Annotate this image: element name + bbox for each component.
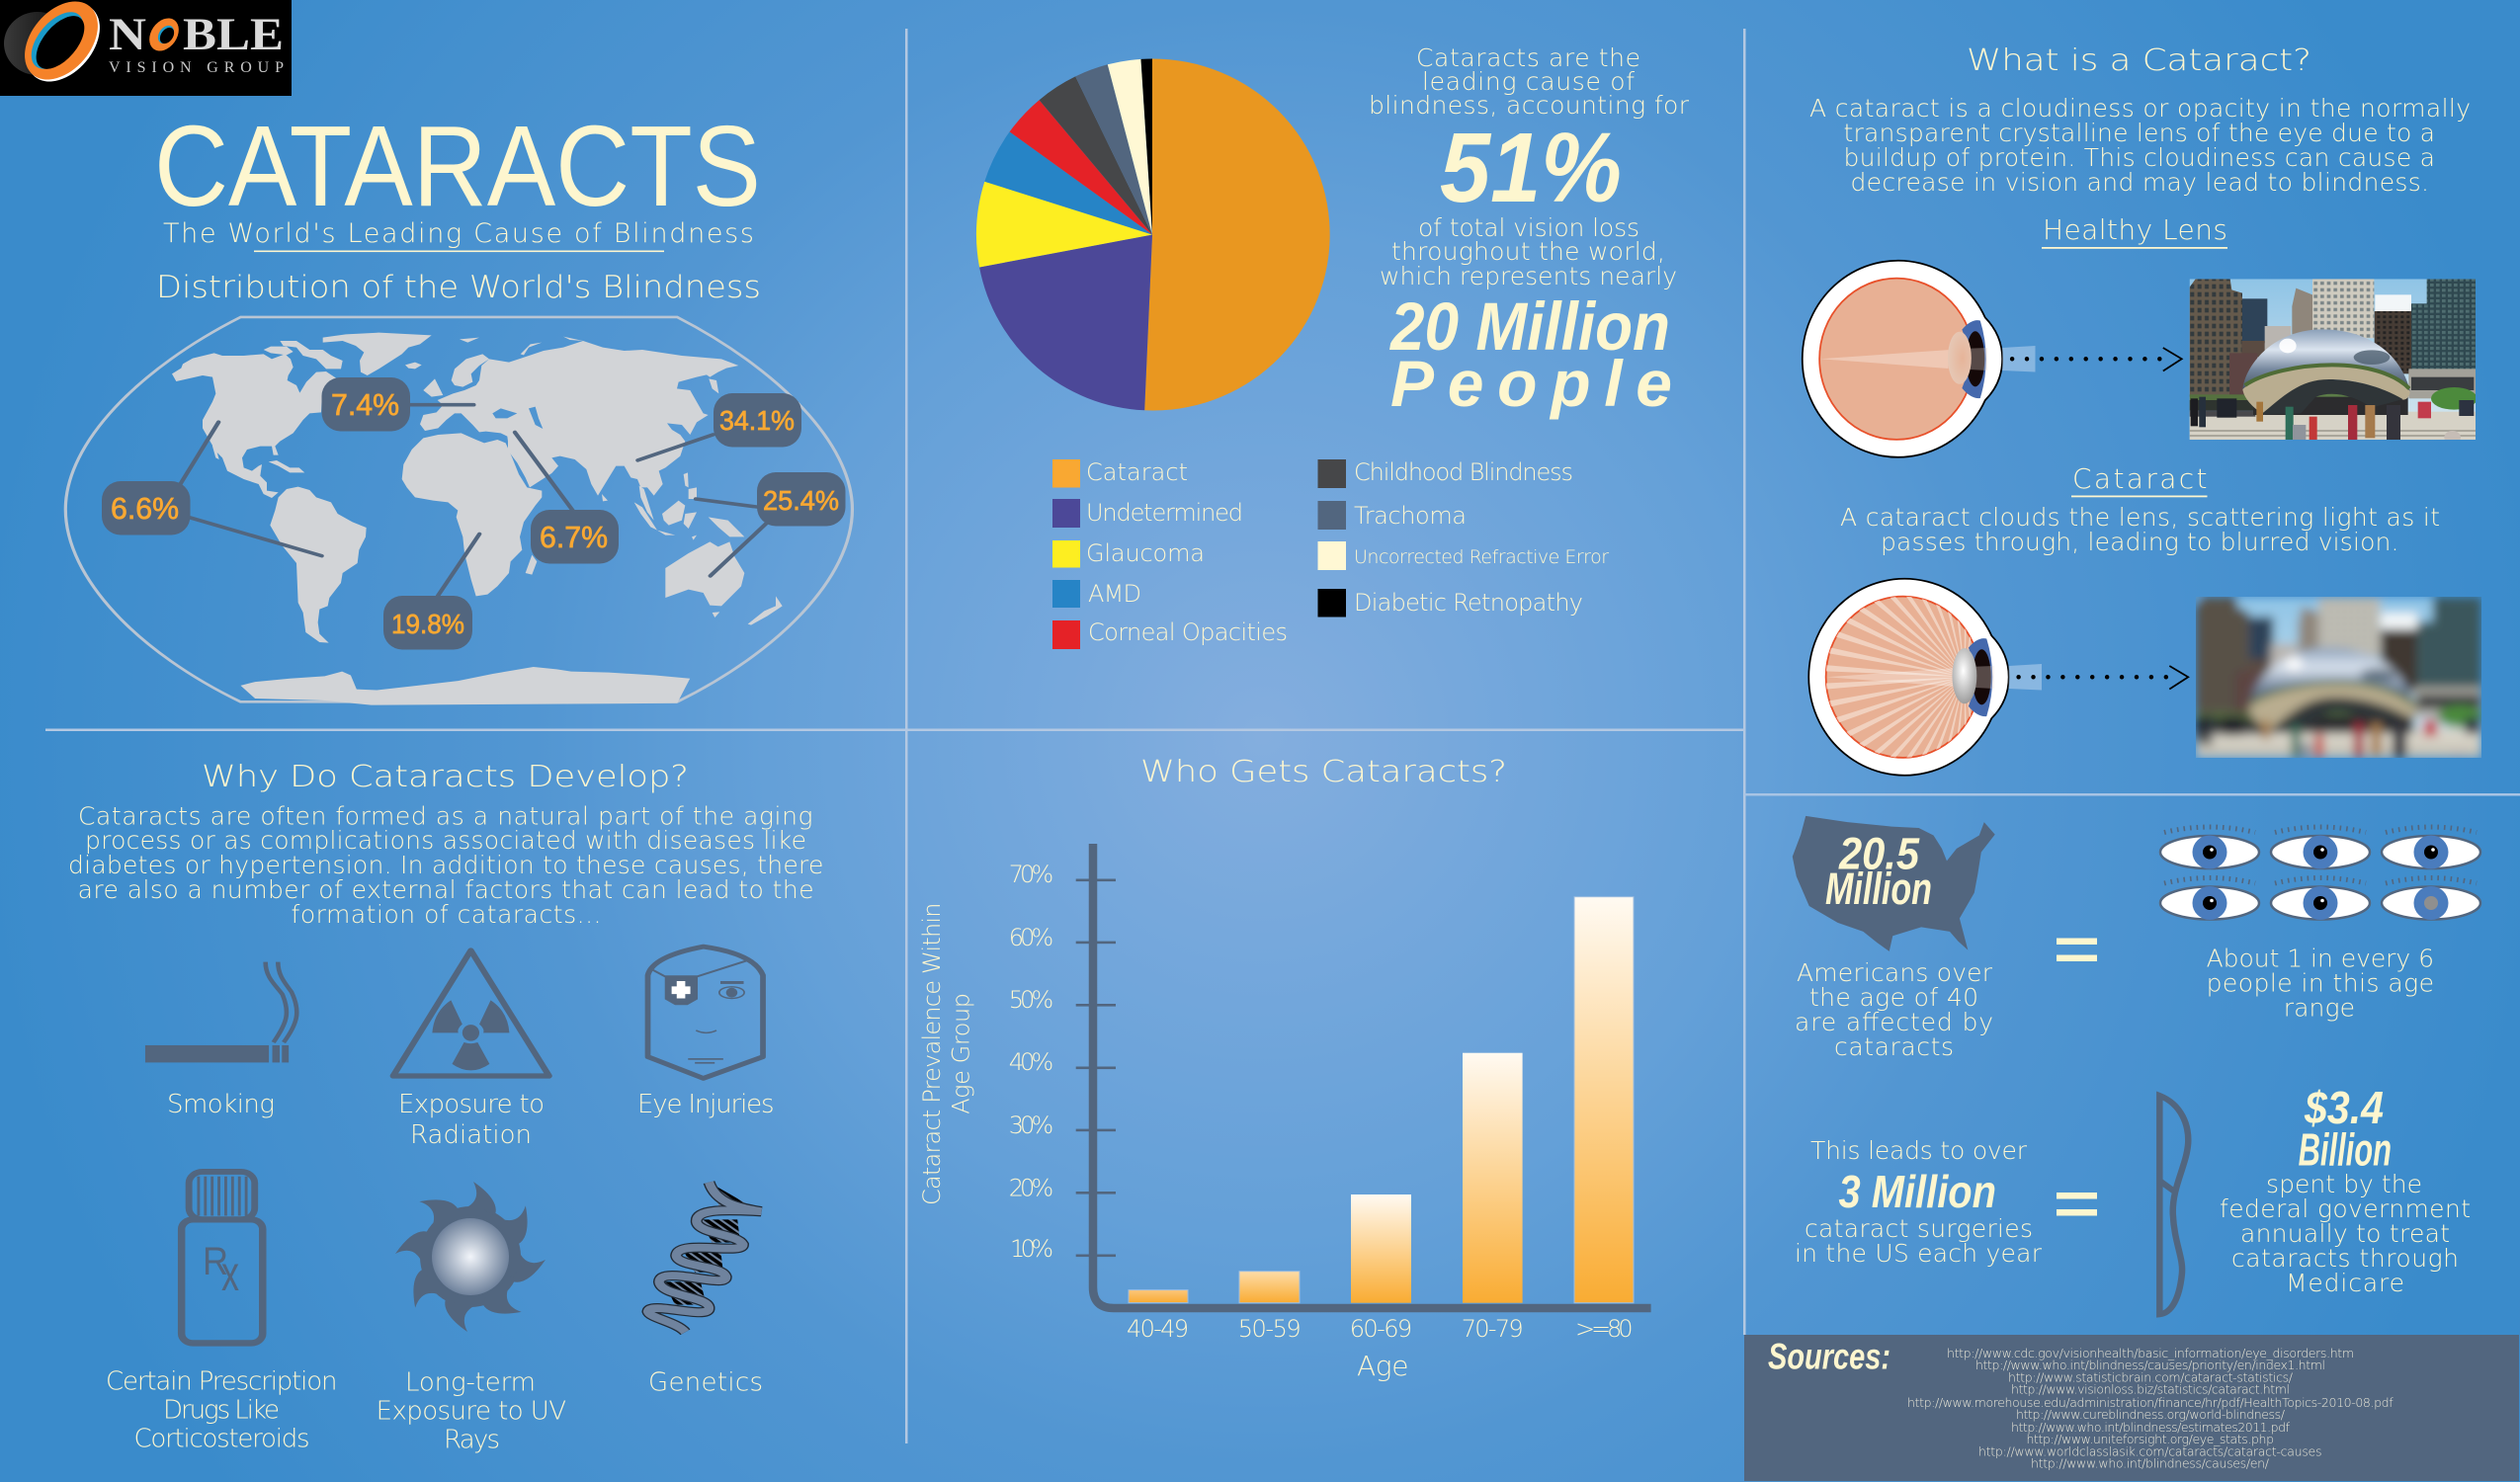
text block: 51% statistic: blindness, accounting for (1369, 91, 1690, 120)
bar chart: prevalence by age: 70% (1009, 861, 1053, 888)
panel: sources: http://www.worldclasslasik.com/cataracts/cataract-causes (1978, 1444, 2322, 1459)
pie legend (1052, 458, 1609, 649)
callout: 7.4% (322, 377, 410, 431)
text: 1 in 6: people in this age (2207, 969, 2434, 998)
equals sign (2057, 1193, 2097, 1215)
logo: Noble Vision Group: VISION GROUP (109, 59, 284, 76)
bar chart: prevalence by age: 70-79 (1462, 1315, 1524, 1343)
stat: $3.4 billion: Billion (2299, 1124, 2392, 1176)
text block: 51% statistic: of total vision loss (1418, 213, 1639, 242)
icon: eye injuries (637, 947, 775, 1119)
definition paragraph: transparent crystalline lens of the eye due to a (1844, 119, 2435, 147)
equals sign (2057, 939, 2097, 961)
pie chart (976, 58, 1330, 410)
text: 1 in 6: About 1 in every 6 (2207, 945, 2434, 973)
stat: 3 million surgeries: cataract surgeries (1805, 1214, 2033, 1243)
heading: cataract: Cataract (2072, 462, 2208, 495)
causes paragraph: formation of cataracts... (291, 900, 601, 929)
icon: UV sun: Exposure to UV (377, 1397, 566, 1427)
panel: sources: http://www.who.int/blindness/causes/priority/en/index1.html (1975, 1358, 2325, 1372)
text block: 51% statistic: Cataracts are the (1416, 43, 1640, 72)
icon and stat: 20.5 million Americans: cataracts (1834, 1032, 1954, 1061)
bar chart: prevalence by age: 50% (1009, 986, 1053, 1014)
callout: 19.8% (383, 596, 472, 650)
subtitle: The World's Leading Cause of Blindness (163, 218, 754, 249)
bar chart: prevalence by age: Age Group (948, 993, 975, 1114)
panel: sources: http://www.morehouse.edu/administration/finance/hr/pdf/HealthTopics-2010-08.pdf (1907, 1395, 2394, 1410)
bar chart: prevalence by age: 10% (1010, 1235, 1053, 1263)
panel: sources: http://www.cdc.gov/visionhealth/basic_information/eye_disorders.htm (1947, 1346, 2354, 1360)
stat: $3.4 billion: spent by the (2266, 1170, 2422, 1198)
causes paragraph: Cataracts are often formed as a natural part of the aging (78, 802, 812, 830)
stat: $3.4 billion: annually to treat (2240, 1219, 2450, 1248)
icon: prescription bottle: x (221, 1246, 239, 1301)
icon: DNA helix (648, 1183, 763, 1397)
definition paragraph: A cataract is a cloudiness or opacity in the normally (1809, 94, 2471, 123)
icons: six eyes (2160, 827, 2480, 920)
text block: 51% statistic: 51% (1440, 113, 1622, 223)
bar chart: prevalence by age: Age (1357, 1350, 1409, 1382)
callout: 6.6%: 6.6% (111, 491, 179, 526)
icon and stat: 20.5 million Americans: Americans over (1797, 958, 1993, 987)
bar chart: prevalence by age (918, 844, 1651, 1382)
stat: 3 million surgeries: This leads to over (1810, 1136, 2028, 1165)
icon: smoking: Smoking (167, 1090, 275, 1119)
bar chart: prevalence by age: 50-59 (1238, 1315, 1302, 1343)
bar chart: prevalence by age: 60% (1009, 924, 1053, 951)
cataract explanation text (1840, 503, 2440, 556)
icon: prescription bottle (106, 1172, 338, 1454)
stat: $3.4 billion (2220, 1082, 2471, 1297)
icon: prescription bottle: Drugs Like (163, 1395, 280, 1425)
icon: prescription bottle: Corticosteroids (134, 1425, 310, 1454)
icon and stat: 20.5 million Americans: 20.5 (1838, 828, 1920, 879)
callout: 7.4%: 7.4% (331, 387, 399, 422)
icon: radiation: Exposure to (398, 1090, 545, 1119)
bar chart: prevalence by age: 20% (1009, 1175, 1053, 1202)
icon: eye injuries: Eye Injuries (637, 1090, 775, 1119)
icon: DNA helix: Genetics (648, 1367, 763, 1397)
callout: 25.4% (757, 472, 846, 526)
icon: radiation (393, 950, 549, 1150)
definition paragraph: buildup of protein. This cloudiness can cause a (1844, 143, 2435, 172)
text block: 51% statistic: People (1390, 347, 1672, 420)
stat: 3 million surgeries: 3 Million (1838, 1166, 1996, 1217)
icon: radiation: Radiation (410, 1120, 532, 1150)
text block: 51% statistic: which represents nearly (1380, 262, 1677, 290)
panel: sources (1744, 1335, 2519, 1481)
eye diagram: cataract (1808, 579, 2188, 776)
icon: prescription bottle: Certain Prescription (106, 1367, 338, 1397)
panel: sources: http://www.who.int/blindness/causes/en/ (2031, 1456, 2270, 1471)
bar chart: prevalence by age: 30% (1009, 1112, 1053, 1139)
bar chart: prevalence by age: Cataract Prevalence Within (918, 903, 946, 1205)
bar chart: prevalence by age: 60-69 (1350, 1315, 1412, 1343)
pie legend: Trachoma (1354, 502, 1467, 530)
text block: 51% statistic: 20 Million (1388, 288, 1670, 365)
icon: scalpel (2159, 1096, 2188, 1314)
heading: what is a cataract: What is a Cataract? (1967, 43, 2311, 78)
causes paragraph: are also a number of external factors that can lead to the (78, 875, 814, 904)
callout: 34.1%: 34.1% (719, 405, 795, 436)
text block: 51% statistic: throughout the world, (1391, 237, 1665, 266)
causes paragraph: process or as complications associated with diseases like (85, 826, 806, 855)
photo: blurred view of Cloud Gate (2196, 597, 2481, 758)
causes paragraph: diabetes or hypertension. In addition to these causes, there (68, 851, 823, 879)
icon and stat: 20.5 million Americans (1793, 816, 1995, 1061)
icon and stat: 20.5 million Americans: Million (1825, 864, 1932, 914)
logo: Noble Vision Group (0, 0, 292, 96)
panel: sources: http://www.statisticbrain.com/cataract-statistics/ (2008, 1370, 2294, 1385)
icon: UV sun: Long-term (405, 1367, 536, 1397)
panel: sources: http://www.cureblindness.org/world-blindness/ (2016, 1407, 2286, 1422)
definition paragraph (1809, 94, 2471, 197)
photo: clear view of Cloud Gate (2190, 279, 2478, 444)
text block: 51% statistic (1369, 43, 1690, 420)
icon: UV sun: Rays (444, 1426, 500, 1455)
heading: who gets cataracts: Who Gets Cataracts? (1140, 755, 1507, 789)
pie legend: Uncorrected Refractive Error (1354, 546, 1609, 568)
cataract explanation text: passes through, leading to blurred vision. (1881, 528, 2399, 556)
icon: UV sun (377, 1182, 566, 1455)
icon: prescription bottle: R (203, 1240, 228, 1283)
logo: Noble Vision Group: N (109, 9, 146, 60)
stat: $3.4 billion: $3.4 (2304, 1082, 2384, 1133)
title: CATARACTS (154, 102, 761, 230)
callout: 6.7%: 6.7% (540, 520, 608, 554)
pie legend: Corneal Opacities (1088, 618, 1288, 646)
cataract explanation text: A cataract clouds the lens, scattering light as it (1840, 503, 2440, 532)
callout: 19.8%: 19.8% (391, 609, 464, 639)
panel: sources: http://www.visionloss.biz/statistics/cataract.html (2011, 1382, 2290, 1397)
panel: sources: http://www.uniteforsight.org/eye_stats.php (2026, 1432, 2274, 1446)
stat: 3 million surgeries: in the US each year (1795, 1239, 2043, 1268)
text: 1 in 6 (2207, 945, 2434, 1023)
stat: $3.4 billion: cataracts through (2231, 1244, 2459, 1273)
heading: why do cataracts develop: Why Do Cataracts Develop? (202, 760, 689, 794)
icon and stat: 20.5 million Americans: the age of 40 (1809, 983, 1978, 1012)
stat: 3 million surgeries (1795, 1136, 2043, 1268)
text block: 51% statistic: leading cause of (1422, 67, 1635, 96)
pie legend: Undetermined (1086, 499, 1243, 527)
pie legend: Cataract (1086, 458, 1188, 486)
pie legend: Glaucoma (1086, 539, 1205, 567)
icon and stat: 20.5 million Americans: are affected by (1795, 1008, 1993, 1036)
world map (65, 317, 852, 705)
callout: 6.6% (102, 481, 190, 535)
pie legend: Diabetic Retnopathy (1354, 589, 1583, 617)
callout: 25.4%: 25.4% (763, 485, 839, 516)
panel: sources: http://www.who.int/blindness/estimates2011.pdf (2011, 1420, 2291, 1435)
bar chart: prevalence by age: 40-49 (1127, 1315, 1189, 1343)
bar chart: prevalence by age: 40% (1009, 1048, 1053, 1076)
text: 1 in 6: range (2284, 994, 2355, 1023)
callout: 6.7% (531, 510, 619, 563)
definition paragraph: decrease in vision and may lead to blindness. (1850, 168, 2429, 197)
callout: 34.1% (714, 393, 801, 447)
panel: sources: Sources: (1768, 1336, 1890, 1377)
stat: $3.4 billion: Medicare (2286, 1269, 2404, 1297)
pie legend: AMD (1088, 580, 1141, 608)
bar chart: prevalence by age: >=80 (1575, 1315, 1633, 1343)
logo: Noble Vision Group: BLE (183, 9, 284, 60)
stat: $3.4 billion: federal government (2220, 1194, 2471, 1223)
eye diagram: healthy lens (1803, 261, 2182, 457)
icon: smoking (145, 962, 296, 1119)
heading: distribution map: Distribution of the World's Blindness (156, 270, 761, 305)
pie legend: Childhood Blindness (1354, 458, 1573, 486)
causes paragraph (68, 802, 823, 929)
heading: healthy lens: Healthy Lens (2043, 213, 2227, 246)
